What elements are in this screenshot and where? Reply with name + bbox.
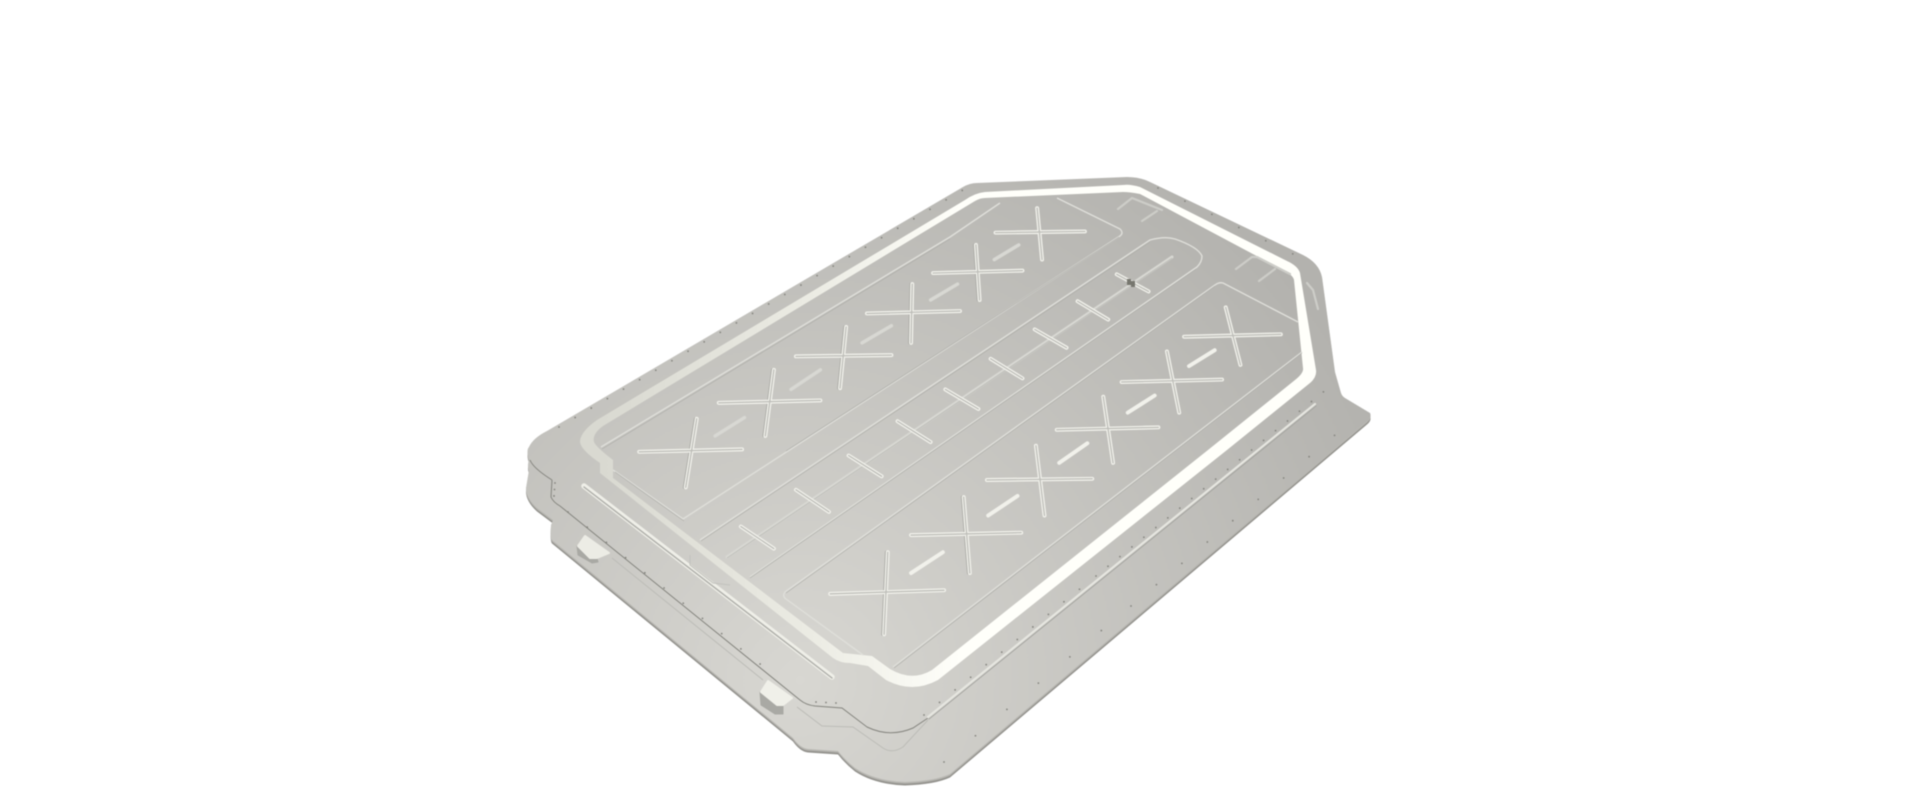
crossed grooves: lower row (830, 307, 1281, 634)
faint corner grooves upper right (1118, 198, 1318, 309)
small dark connector (1127, 279, 1135, 287)
mounting tab left (577, 536, 609, 563)
double dashes across channel (741, 274, 1149, 549)
channel centre line (727, 257, 1172, 558)
plate silhouette (526, 177, 1371, 782)
rivet dots (554, 188, 1335, 762)
short grooves: upper row (715, 245, 1019, 436)
long slot along lower-left edge (584, 486, 832, 678)
lower layer thin outline (612, 558, 928, 751)
ridge along right edge (928, 404, 1316, 719)
sealing band (580, 185, 1316, 687)
embossed panel: upper left (601, 198, 1122, 521)
crossed grooves: upper row (639, 208, 1085, 487)
short grooves: lower row (911, 350, 1215, 573)
top layer edge lines (530, 460, 928, 733)
embossed panel: centre channel (700, 238, 1202, 578)
plate underside thickness (526, 179, 1371, 786)
embossed panel: lower right (784, 283, 1302, 668)
mounting tab right (760, 681, 792, 714)
notch under the band (690, 555, 730, 585)
